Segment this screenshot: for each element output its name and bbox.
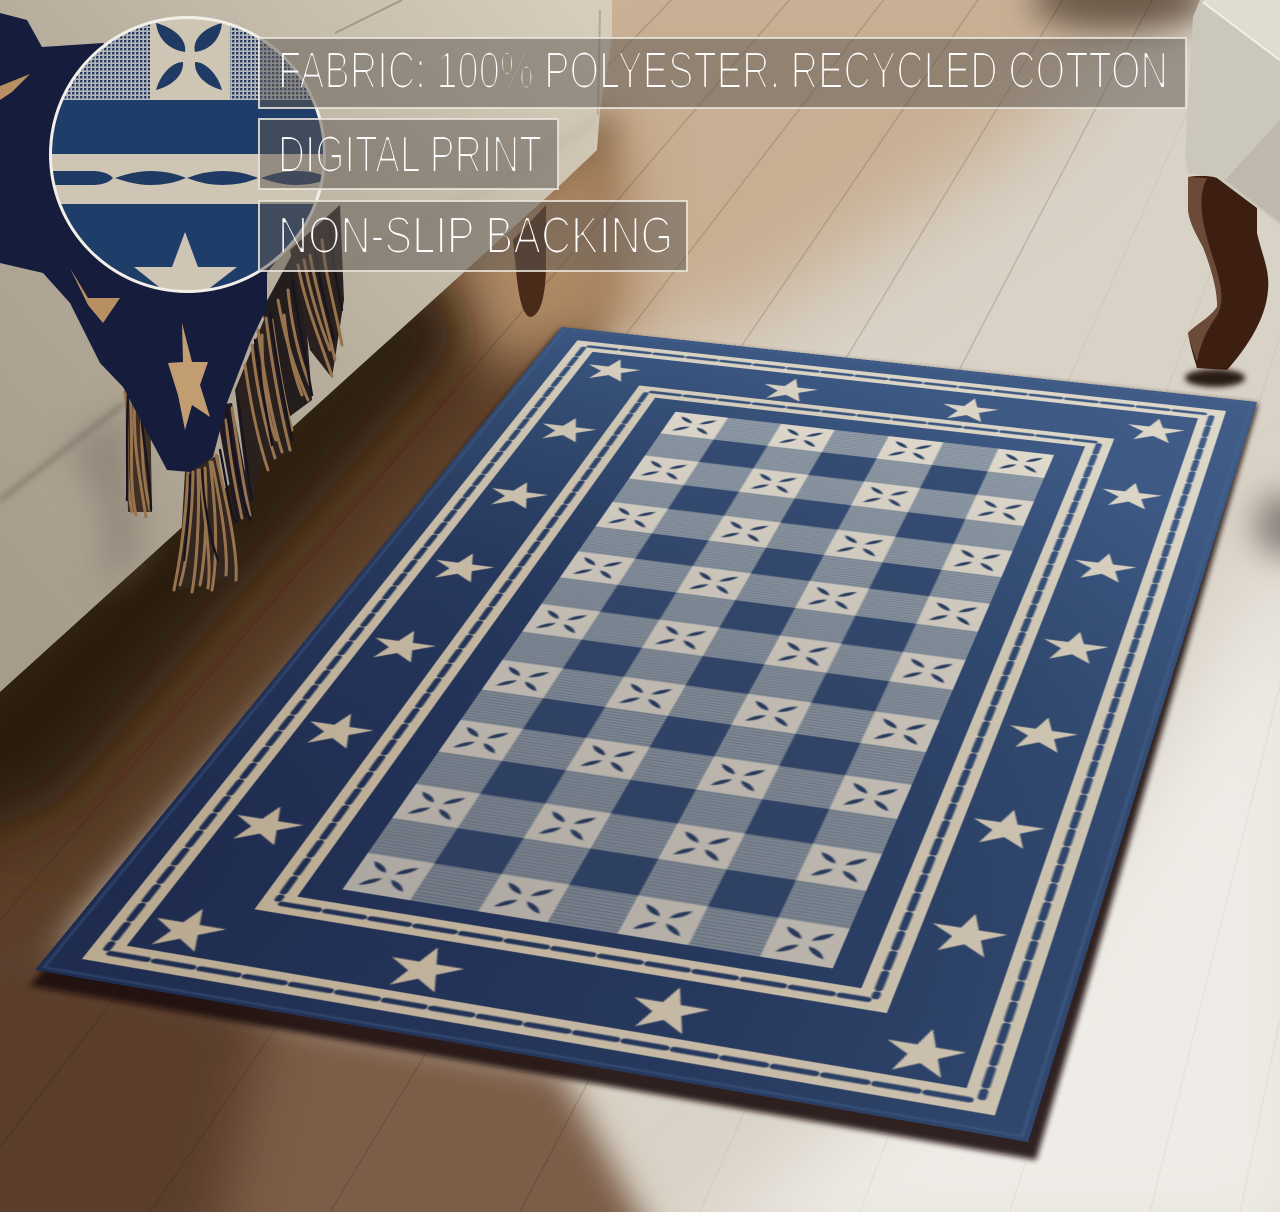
- cream stripe with lens chain: [40, 154, 330, 204]
- rug shadow: [30, 330, 1258, 1160]
- blanket star: [168, 323, 210, 430]
- fabric close-up circle: [40, 17, 330, 310]
- woven check swatch: [64, 24, 312, 100]
- rug hem: [44, 329, 1251, 1136]
- outer chain motif: [104, 346, 1212, 1102]
- rug in perspective: [35, 327, 1257, 1142]
- cream check cell with petals: [150, 17, 230, 100]
- blanket star fragment: [0, 74, 30, 100]
- sofa: [0, 0, 612, 692]
- close-up star: [134, 232, 237, 290]
- chair upholstery: [1185, 0, 1280, 225]
- throw blanket: [0, 13, 300, 472]
- fabric close-up circle and feature labels: [49, 16, 1187, 293]
- sofa leg: [513, 205, 546, 317]
- blanket star partial: [70, 268, 120, 323]
- checkerboard with petal motifs: [342, 412, 1054, 968]
- label: digital print: [259, 119, 558, 189]
- inner chain motif: [276, 392, 1100, 1001]
- inner cream band: [276, 392, 1100, 1001]
- label: non-slip backing: NON-SLIP BACKING: [278, 207, 673, 265]
- chair leg: [1188, 176, 1268, 370]
- outer cream band: [104, 346, 1212, 1102]
- border stars: [138, 357, 1188, 1080]
- label: non-slip backing: [259, 201, 687, 271]
- throw blanket fringe: [125, 205, 344, 592]
- rug base field: [35, 327, 1257, 1142]
- label: digital print: DIGITAL PRINT: [278, 126, 542, 184]
